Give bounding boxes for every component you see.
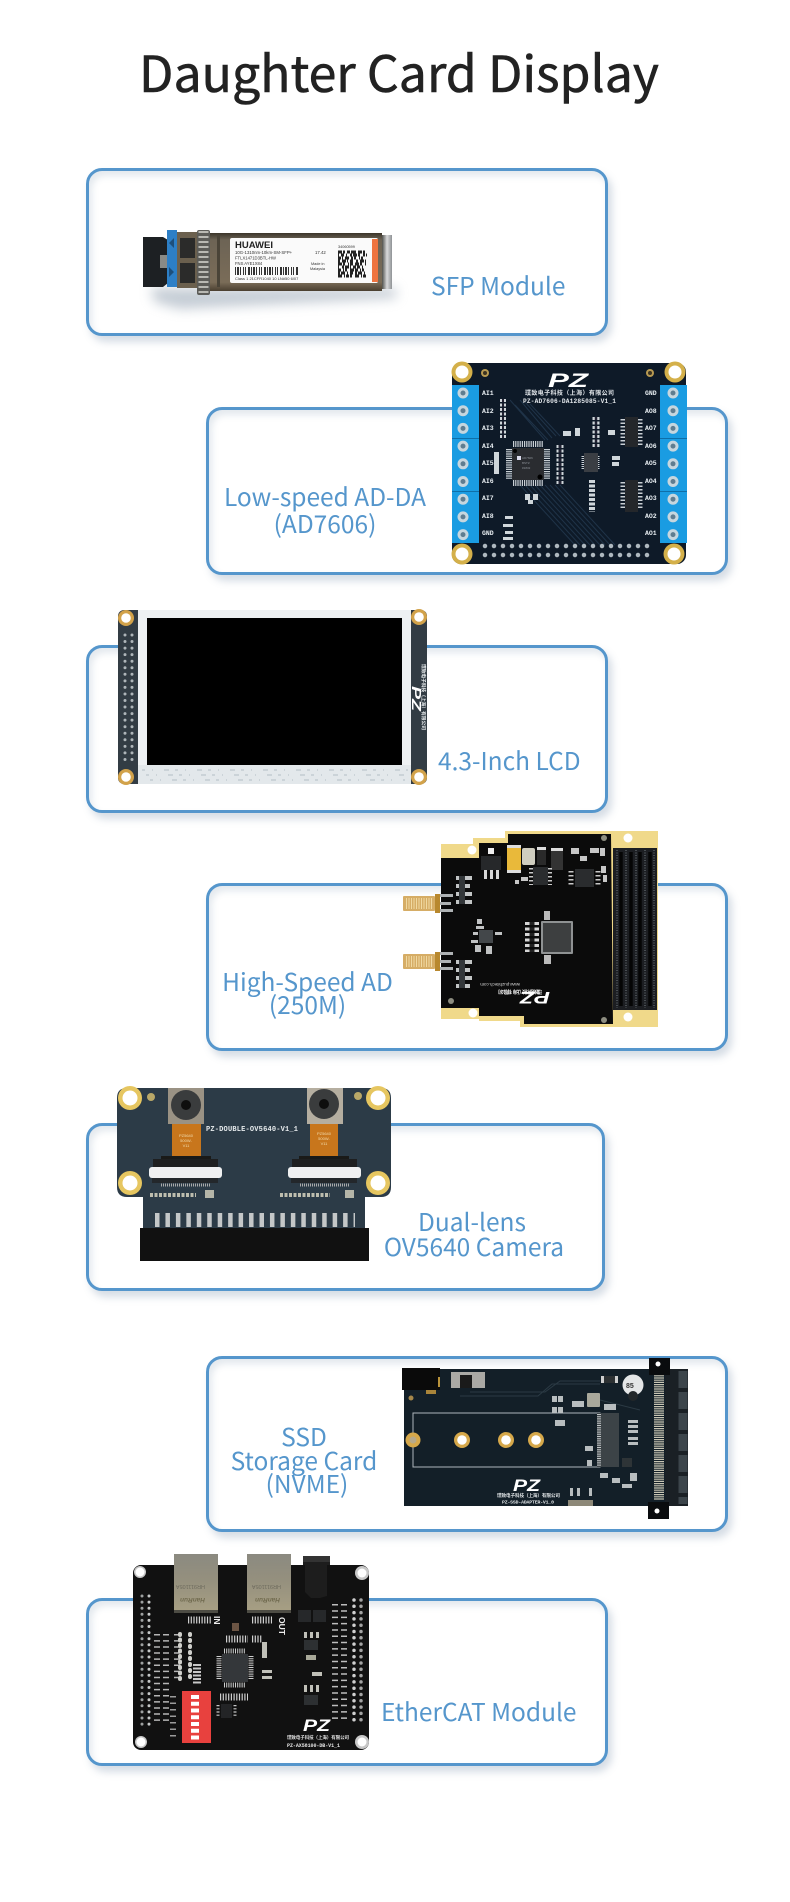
power jack [303,1556,330,1598]
board: EtherCAT: HR911105A [252,1583,281,1589]
inverted board text: www.puzhitech.com [480,982,520,987]
board: SFP transceiver [143,230,400,315]
brackets [648,1358,670,1519]
corner holes [134,1566,369,1749]
pin labels: AI6 [482,478,494,485]
title: Daughter Card Display [139,35,659,107]
board: SFP transceiver: FNS AYE1X84 [235,261,263,266]
board: SFP transceiver: HUAWEI [235,240,273,251]
board: LCD: 璞致电子科技（上海）有限公司 [420,664,427,730]
pin labels: AI2 [482,408,494,415]
switch [451,1372,485,1388]
board: EtherCAT: HanRun [180,1596,205,1603]
label: Dual-lens OV5640 Camera [384,1204,564,1264]
SMA side parts [456,876,472,988]
pin labels: AO3 [645,495,657,502]
M.2 connector [597,1413,619,1467]
main chip [224,1651,246,1685]
board: SSD adapter: 璞致电子科技（上海）有限公司 [497,1492,560,1499]
through-hole rows [485,544,655,548]
board: AD7606: 璞致电子科技（上海）有限公司 [525,389,614,397]
board: EtherCAT [133,1554,369,1750]
card frame [206,1356,728,1532]
card frame [206,407,728,575]
board: high-speed AD: PZ [519,988,550,1007]
RJ45 OUT [247,1554,291,1613]
label: SSD Storage Card (NVME): Storage Card [231,1442,377,1478]
label: Dual-lens OV5640 Camera: OV5640 Camera [384,1228,564,1264]
label: Dual-lens OV5640 Camera: Dual-lens [418,1204,526,1239]
pin labels: AI1 [482,390,494,397]
right pin columns [332,1604,338,1722]
board: dual camera: V11 [321,1141,328,1146]
board: EtherCAT: HR911105A [176,1583,205,1589]
panel: High-Speed AD [206,831,736,1060]
label: High-Speed AD (250M) [222,964,393,1022]
board: dual camera: V11 [183,1143,190,1148]
header body [140,1228,369,1261]
right parts [298,1610,311,1622]
pin labels: AI5 [482,460,494,467]
board: SSD adapter: 85 [626,1383,634,1390]
pin labels: AO4 [645,478,657,485]
label: SFP Module: SFP Module [431,268,565,303]
resistor rows [188,1620,272,1697]
SMA connectors [403,896,435,911]
board: dual camera: 500W- [180,1138,193,1143]
panel: SFP Module [86,168,616,346]
pin labels: AO8 [645,408,657,415]
board: SFP transceiver: Malaysia [310,267,326,271]
label: Low-speed AD-DA (AD7606): Low-speed AD-DA [224,479,426,514]
pin labels: GND [645,390,657,397]
IN text: IN [212,1616,222,1624]
small parts [494,428,620,540]
main chip [541,921,573,954]
board: AD7606: PZ-AD7606-DA1285085-V1_1 [523,398,616,405]
board: AD7606: AD7606 [522,456,533,460]
panel: Dual-lens OV5640 Camera [86,1086,612,1300]
pin labels: AI8 [482,513,494,520]
label: SSD Storage Card (NVME): SSD [281,1419,327,1454]
second chip [583,456,598,470]
label: SSD Storage Card (NVME) [231,1419,377,1501]
board: SSD adapter: PZ-SSD-ADAPTER-V1_0 [502,1500,554,1506]
board: high-speed AD [403,831,658,1027]
M.2 outline [413,1413,600,1467]
gold edge connector [654,1373,664,1500]
pin labels: GND [482,530,494,537]
panel: SSD Storage Card [206,1356,736,1542]
pin labels: AI7 [482,495,494,502]
header pins [155,1213,355,1227]
board: SFP transceiver: Class 1 21CFR1040 10 LN#50 6/07 [235,276,299,281]
board: AD7606: #1832 [522,466,531,470]
label: High-Speed AD (250M): High-Speed AD [222,964,393,999]
board: dual camera [117,1086,391,1261]
board: LCD: PZ [409,686,424,713]
board: EtherCAT: 璞致电子科技（上海）有限公司 [287,1734,350,1741]
board: LCD [118,609,427,785]
LED columns [178,1634,182,1680]
board: SSD adapter [402,1358,688,1519]
logo and board text: PZ [303,1716,331,1735]
pin labels [482,390,657,537]
terminal blocks [452,385,687,543]
main chip [513,444,543,483]
board: AD7606: BSTZ [522,461,530,465]
top components [481,856,501,870]
board: SFP transceiver: 34060599 [338,245,355,249]
board: SFP transceiver: FTLX1471D3BTL-HW [235,256,276,260]
second chip [479,930,493,943]
pin labels: AO2 [645,513,657,520]
mounting rings [406,1432,544,1448]
RJ45 IN [174,1554,218,1613]
card frame [86,645,608,813]
board: EtherCAT: PZ-AX58100-DB-V1_1 [287,1743,340,1749]
label: 4.3-Inch LCD: 4.3-Inch LCD [438,743,581,778]
board: dual camera: PZ5640 [317,1131,332,1136]
FPC connectors [161,1156,211,1160]
card frame [206,883,728,1051]
screen [147,618,402,765]
label: SSD Storage Card (NVME): (NVME) [266,1466,348,1501]
power jack [402,1368,440,1390]
pin header [568,1500,593,1506]
label: Low-speed AD-DA (AD7606): (AD7606) [274,506,376,541]
resistor columns [500,399,506,438]
camera modules [168,1088,204,1124]
panel: 4.3-Inch LCD [86,609,616,822]
board: dual camera: PZ5640 [179,1133,194,1138]
logo and board text: PZ [548,371,590,392]
board: dual camera: PZ-DOUBLE-OV5640-V1_1 [206,1126,298,1134]
board connector [613,848,657,1010]
DIP switch [182,1691,211,1743]
label: High-Speed AD (250M): (250M) [269,987,346,1022]
pin labels: AO1 [645,530,657,537]
pin labels: AO7 [645,425,657,432]
card frame [86,1598,608,1766]
capacitor and inductor [622,1374,644,1396]
board: SFP transceiver: 17.42 [315,250,326,255]
pin labels: AO6 [645,443,657,450]
label: Low-speed AD-DA (AD7606) [224,479,426,541]
board: high-speed AD: 璞致电子科技（上海）有限公司 [498,988,542,995]
flex cables [172,1124,201,1157]
board: SFP transceiver: Made in [311,262,325,266]
pin labels: AI3 [482,425,494,432]
panel: EtherCAT Module [86,1554,616,1776]
board: EtherCAT: HanRun [255,1596,280,1603]
small chip [221,1704,232,1718]
card frame [86,168,608,336]
board: SFP transceiver: 10G-1310nm-10km-SM-SFP+ [235,250,293,255]
OUT text: OUT [277,1617,287,1636]
card frame [86,1123,605,1291]
label: EtherCAT Module: EtherCAT Module [381,1694,576,1729]
small parts [150,1193,196,1197]
board: AD7606 [452,362,687,564]
panel: Low-speed AD-DA [206,362,736,584]
logo and board text: PZ [513,1476,541,1495]
small parts [552,1396,638,1496]
board: dual camera: 500W- [318,1136,331,1141]
left pin columns [140,1596,144,1725]
pin labels: AO5 [645,460,657,467]
pin labels: AI4 [482,443,494,450]
SOIC chips [623,419,640,510]
